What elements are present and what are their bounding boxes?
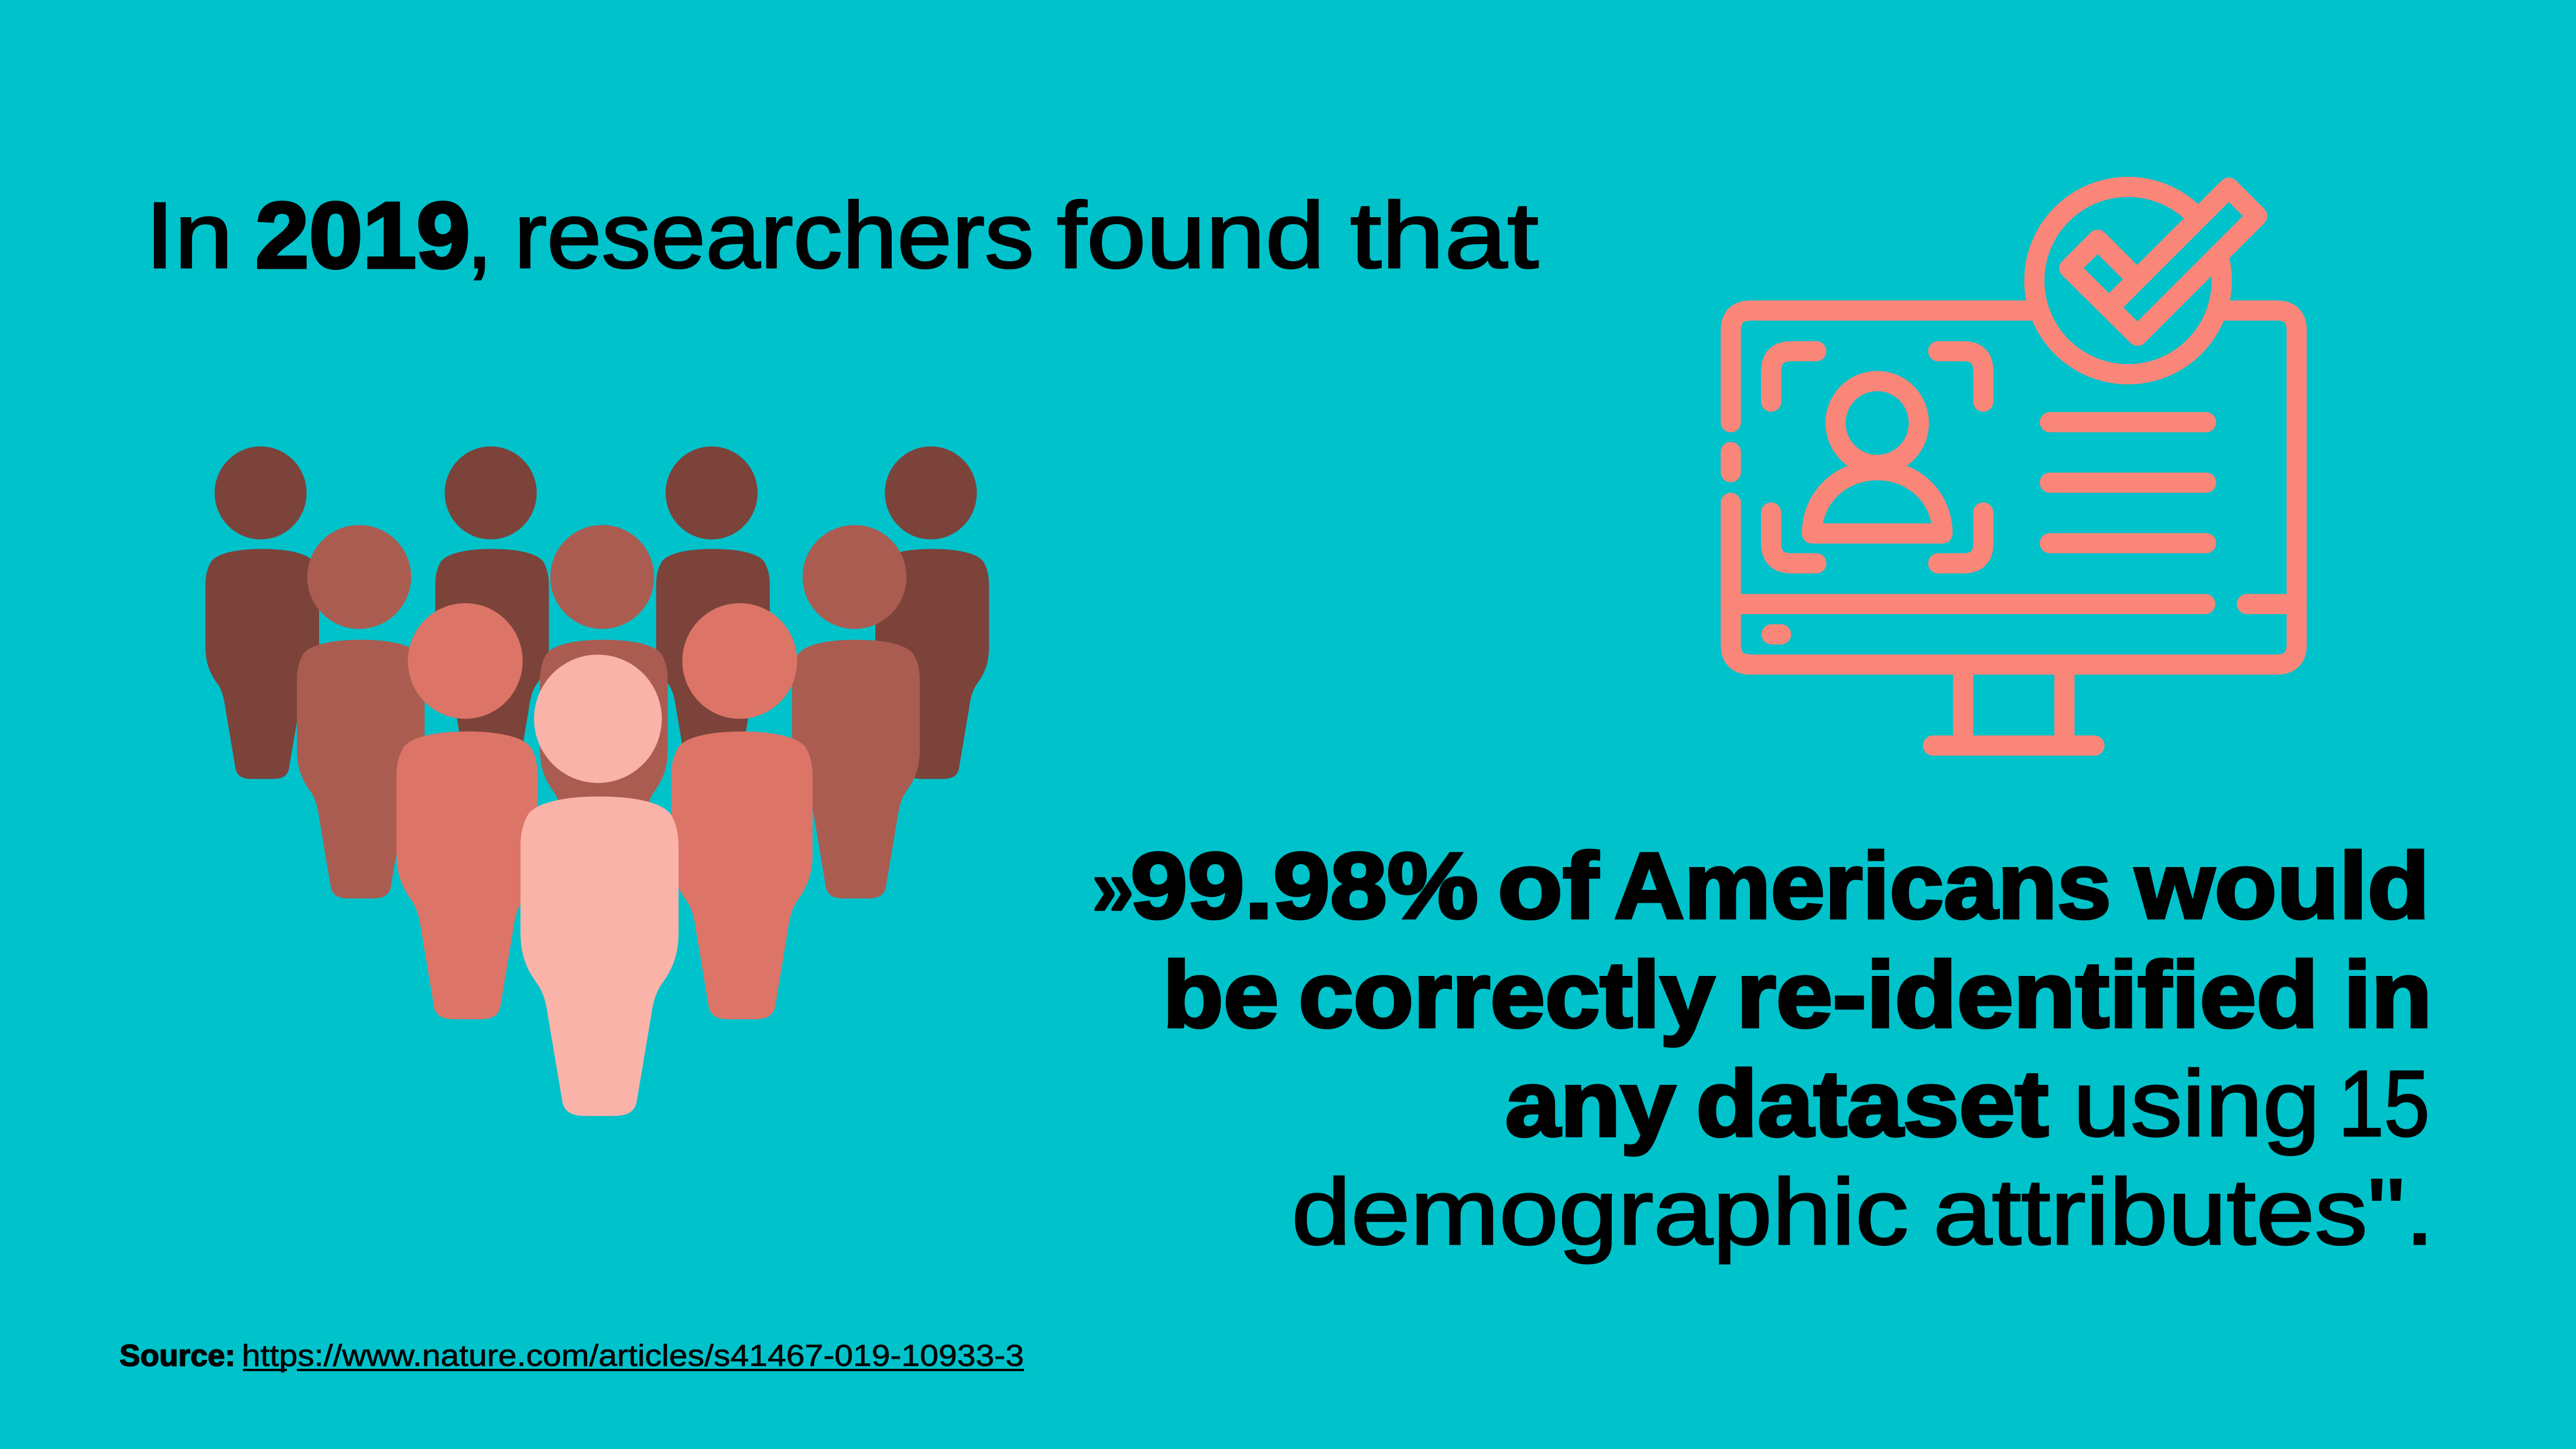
monitor stand [1933, 664, 2095, 746]
heading: In 2019, researchers found that: In [145, 183, 233, 287]
heading: In 2019, researchers found that: that [1350, 183, 1539, 287]
statement text: attributes". [1933, 1159, 2434, 1264]
statement text: in [2344, 942, 2432, 1047]
statement text: demographic [1292, 1159, 1909, 1264]
statement text: using [2073, 1051, 2320, 1156]
statement text: correctly [1299, 942, 1715, 1047]
statement text: dataset [1696, 1051, 2049, 1156]
heading: In 2019, researchers found that: found [1057, 183, 1325, 287]
lead person [520, 655, 679, 1116]
verification circle [2034, 187, 2222, 374]
icon: crowd of people [205, 446, 989, 1116]
check mark [2070, 188, 2257, 335]
middle row of people [297, 525, 920, 899]
statement text: of [1498, 833, 1599, 938]
back row of people [205, 446, 989, 779]
statement text: re-identified [1736, 942, 2318, 1047]
statement text: be [1163, 942, 1279, 1047]
heading: In 2019, researchers found that [145, 183, 1539, 287]
source line: Source: [119, 1339, 235, 1373]
statement text: 15 [2338, 1051, 2430, 1156]
front pair of people [396, 603, 813, 1019]
statement text: Americans [1614, 833, 2111, 938]
text lines [2050, 422, 2206, 543]
statement text: » [1092, 841, 1134, 933]
statement text: any [1505, 1051, 1676, 1156]
monitor frame [1731, 310, 2297, 664]
heading: In 2019, researchers found that: researchers [514, 183, 1034, 287]
statement text: would [2135, 833, 2430, 938]
source line: https://www.nature.com/articles/s41467-019-10933-3 [242, 1339, 1024, 1373]
icon: monitor with verified identity [1731, 187, 2297, 746]
scan brackets [1771, 351, 1984, 563]
monitor base bar [1731, 604, 2297, 634]
person portrait [1812, 381, 1943, 533]
statement text: 99.98% [1131, 833, 1478, 938]
heading: In 2019, researchers found that: , [467, 183, 492, 287]
heading: In 2019, researchers found that: 2019 [255, 183, 470, 287]
statement text [1092, 833, 2434, 1264]
